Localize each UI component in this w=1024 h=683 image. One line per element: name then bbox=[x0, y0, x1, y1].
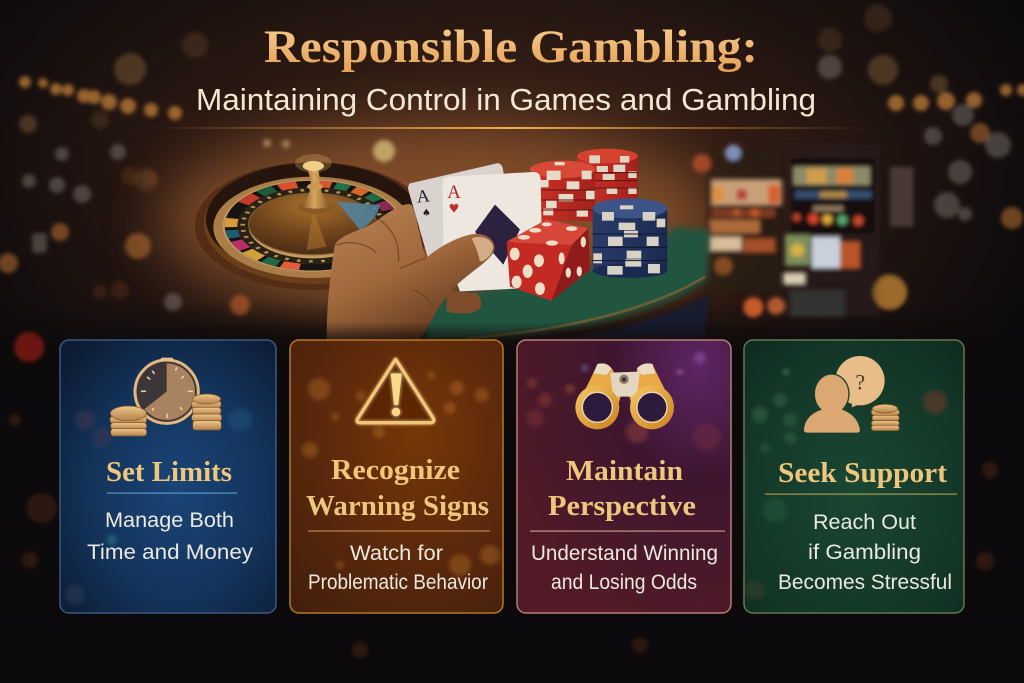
text: seek support: Becomes Stressful bbox=[778, 571, 952, 594]
heading: maintain perspective: Maintain bbox=[566, 456, 683, 487]
heading: maintain perspective: Perspective bbox=[548, 491, 696, 522]
panel bokeh: warning signs bbox=[302, 371, 500, 576]
hand holding cards bbox=[327, 204, 494, 340]
title rule bbox=[150, 127, 870, 129]
heading: recognize warning signs: Recognize bbox=[331, 455, 460, 486]
subtitle: Maintaining Control in Games and Gambling bbox=[196, 82, 816, 117]
heading: seek support: Seek Support bbox=[778, 458, 948, 489]
slot machines bbox=[692, 143, 913, 317]
chip stack: front red bbox=[530, 161, 595, 221]
icon: binoculars bbox=[575, 363, 674, 429]
playing card: ace of hearts bbox=[443, 172, 543, 291]
text: set limits: Time and Money bbox=[87, 541, 254, 564]
heading: maintain perspective bbox=[548, 456, 696, 522]
casino table bbox=[420, 227, 710, 347]
text: perspective bbox=[531, 542, 718, 594]
text: set limits: Manage Both bbox=[105, 509, 234, 532]
icon: stopwatch and coins bbox=[110, 358, 222, 436]
spindle bbox=[295, 154, 335, 214]
panel: maintain perspective bbox=[517, 340, 731, 613]
icon: warning triangle bbox=[357, 359, 434, 423]
panel bokeh: perspective bbox=[526, 352, 721, 451]
text: set limits bbox=[87, 509, 254, 564]
text: warning signs: Watch for bbox=[350, 542, 443, 565]
text: warning signs: Problematic Behavior bbox=[308, 571, 488, 594]
playing card: ace of spades: ♠ bbox=[422, 208, 431, 219]
roulette wheel bbox=[195, 154, 432, 290]
panel: recognize warning signs bbox=[290, 340, 503, 613]
chip stack: rear red bbox=[577, 149, 638, 201]
heading: set limits: Set Limits bbox=[106, 457, 232, 488]
heading: recognize warning signs bbox=[306, 455, 489, 522]
central scene: casino table, roulette, cards, chips, dice, hand bbox=[195, 149, 710, 347]
icon: person with question bubble and coins: ? bbox=[855, 369, 865, 394]
playing card: ace of spades bbox=[408, 163, 513, 259]
playing card: ace of spades: A bbox=[416, 185, 431, 207]
icon: person with question bubble and coins bbox=[804, 356, 899, 433]
chip stack: blue bbox=[593, 198, 667, 278]
text: perspective: and Losing Odds bbox=[551, 571, 697, 594]
scene lower fade bbox=[170, 322, 770, 342]
playing card: ace of hearts: ♥ bbox=[449, 202, 459, 216]
panel: seek support bbox=[744, 340, 964, 613]
panel bokeh: set limits bbox=[65, 408, 252, 605]
heading: recognize warning signs: Warning Signs bbox=[306, 491, 489, 522]
title: Responsible Gambling: bbox=[264, 21, 758, 73]
red dice bbox=[507, 219, 590, 301]
panel bokeh: seek support bbox=[745, 369, 947, 600]
panel: set limits bbox=[60, 340, 276, 613]
text: perspective: Understand Winning bbox=[531, 542, 718, 565]
text: warning signs bbox=[308, 542, 488, 594]
text: seek support: if Gambling bbox=[808, 541, 921, 564]
text: seek support bbox=[778, 511, 952, 594]
playing card: ace of hearts: A bbox=[447, 182, 461, 203]
text: seek support: Reach Out bbox=[813, 511, 916, 534]
